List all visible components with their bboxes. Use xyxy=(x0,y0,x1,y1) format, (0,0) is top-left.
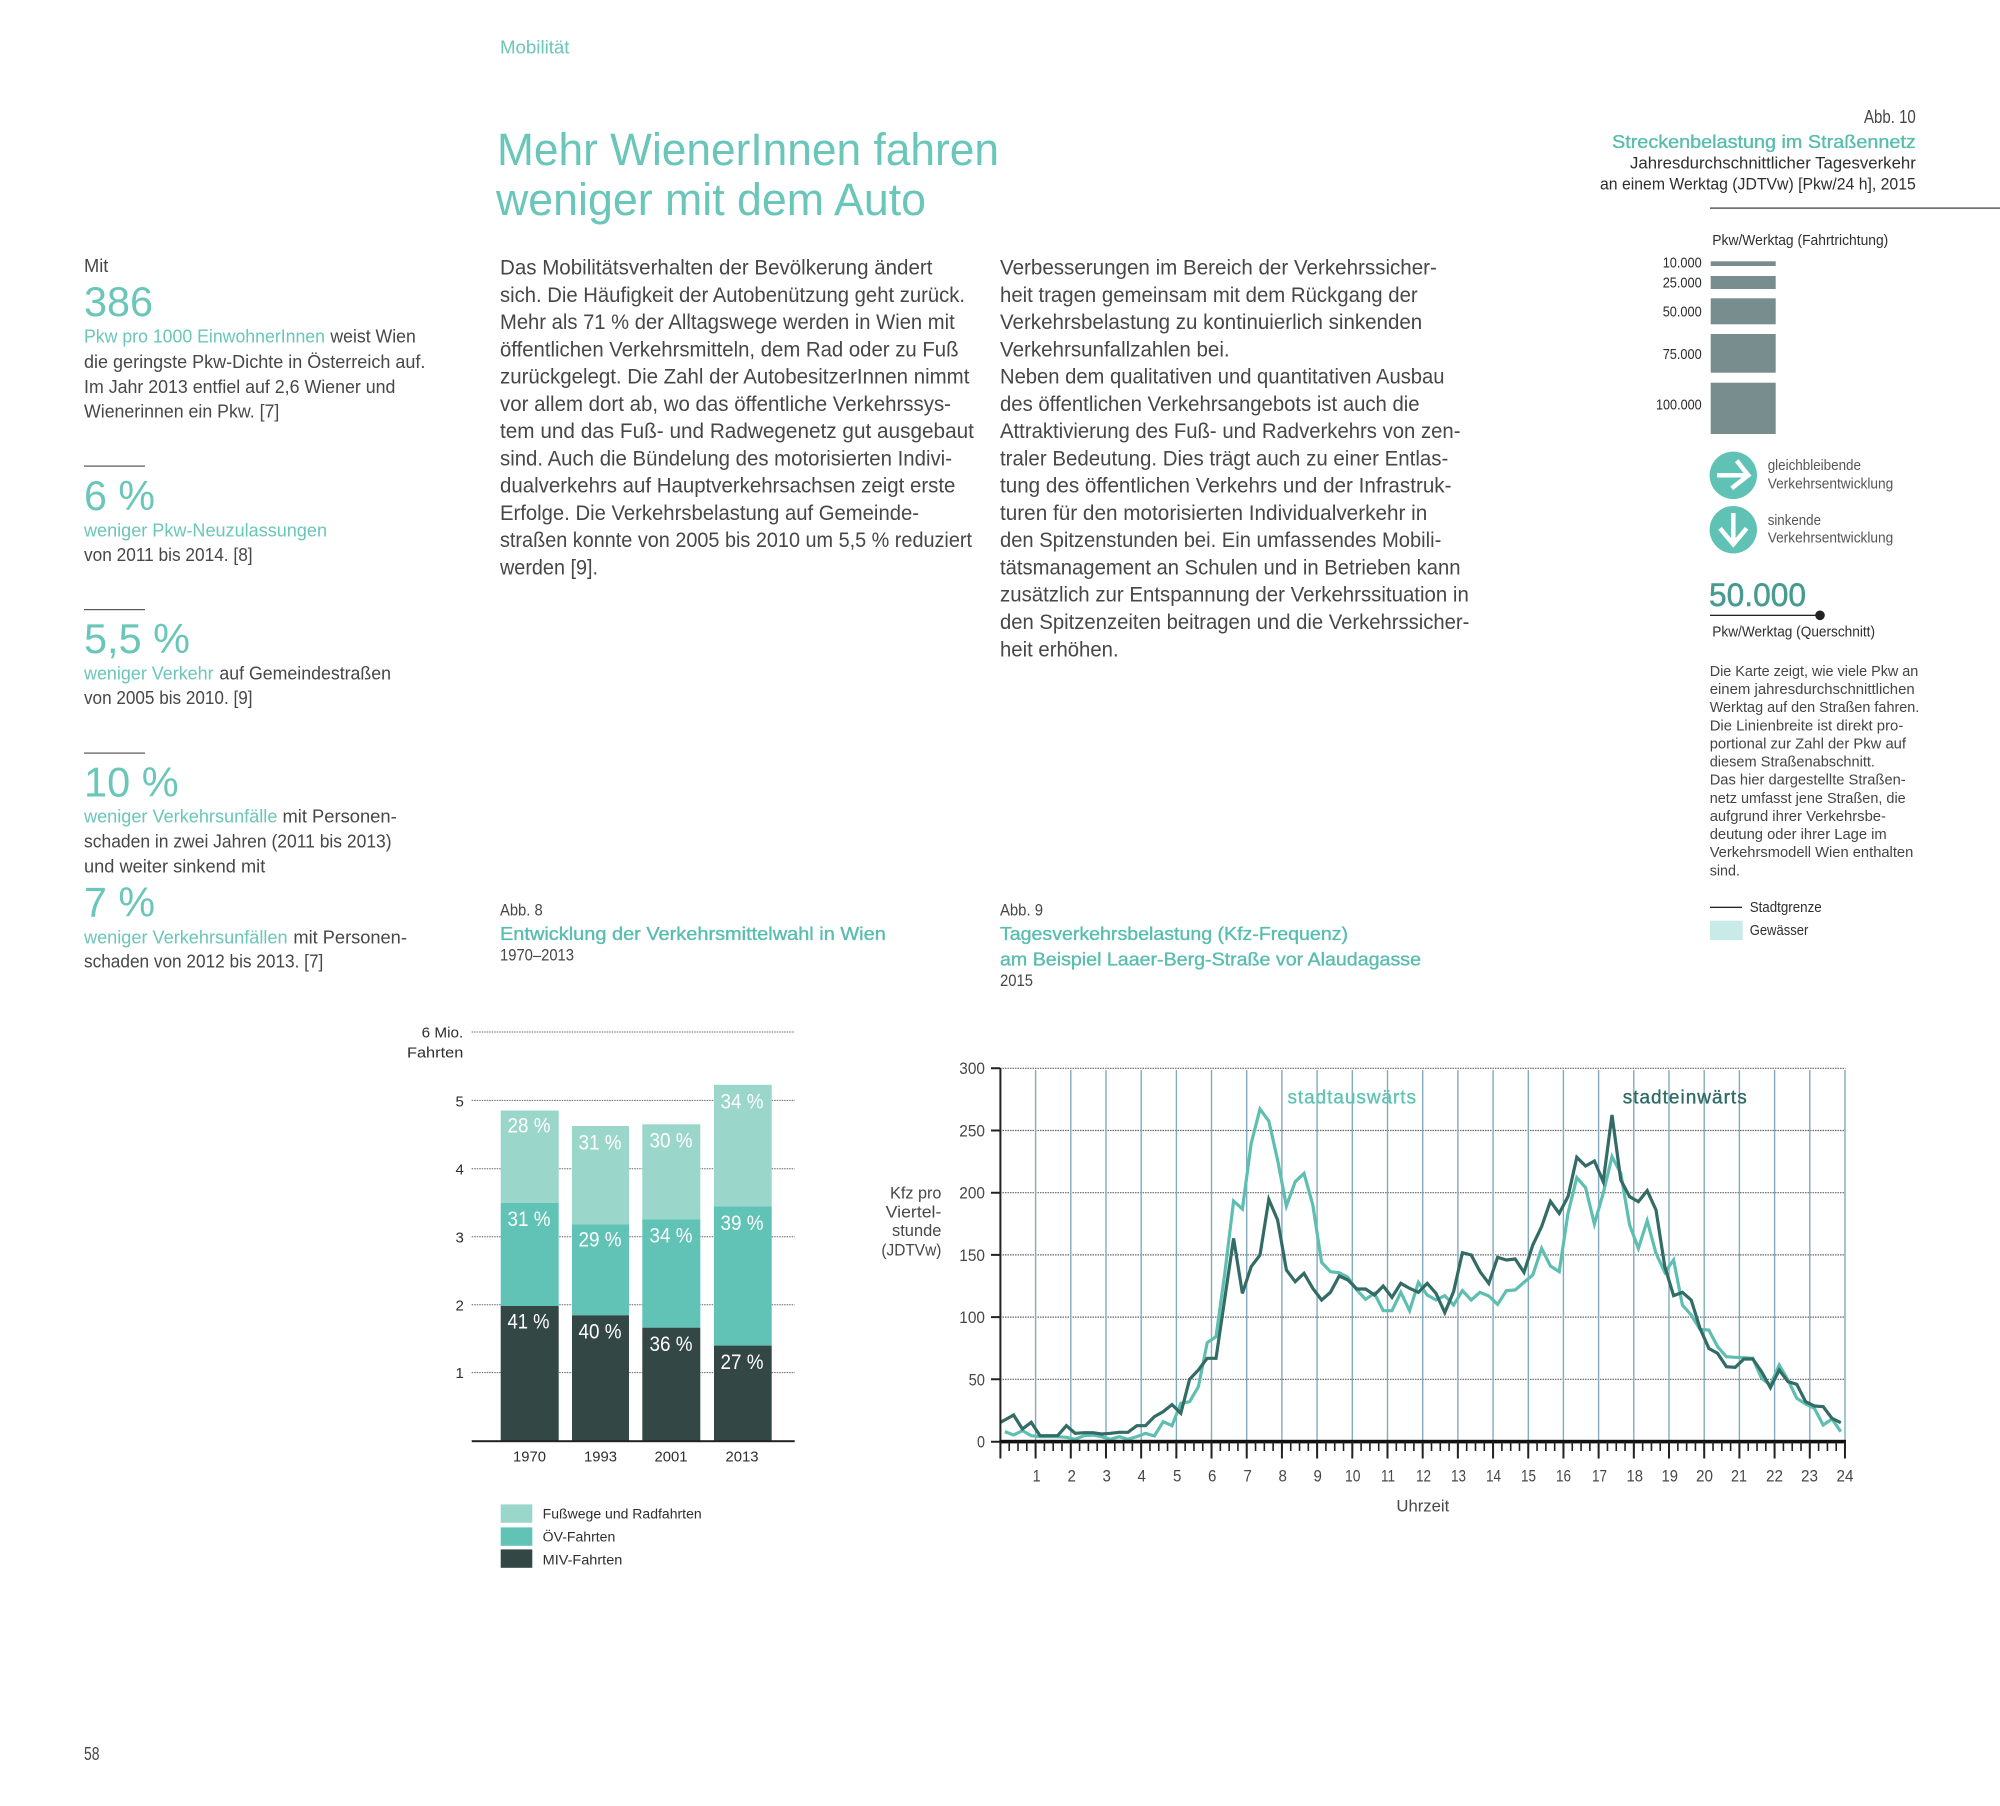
y axis title: (JDTVw) xyxy=(881,1241,941,1260)
series label: stadtauswärts: stadtauswärts xyxy=(1288,1087,1416,1108)
series label: stadteinwärts: stadteinwärts xyxy=(1623,1087,1747,1108)
x axis hour labels: 14 xyxy=(1486,1467,1501,1486)
section label: Mobilität: Mobilität xyxy=(500,37,570,58)
line: stadtauswärts xyxy=(1005,1109,1841,1439)
legend: bar chart: ÖV-Fahrten xyxy=(543,1530,615,1545)
body text column 1 xyxy=(499,256,974,580)
body text column 1: Das Mobilitätsverhalten der Bevölkerung ändert xyxy=(500,256,933,280)
legend: bar chart: MIV-Fahrten xyxy=(543,1553,622,1568)
legend: Stadtgrenze / Gewässer xyxy=(1710,899,1822,940)
x axis hour labels: 23 xyxy=(1801,1467,1818,1486)
line chart: Tagesverkehrsbelastung xyxy=(881,1059,1854,1516)
legend: cross-section marker 50.000: Pkw/Werktag (Querschnitt) xyxy=(1712,624,1875,641)
body text column 2: tung des öffentlichen Verkehrs und der Infrastruk- xyxy=(1000,475,1452,498)
bar 1970: 41 % xyxy=(508,1311,550,1334)
x axis hour labels: 4 xyxy=(1138,1467,1146,1486)
left column: key figures xyxy=(83,255,425,972)
stat: 7 %: weniger Verkehrsunfällen xyxy=(83,926,288,947)
legend: line widths: 10.000 xyxy=(1663,255,1702,272)
y axis labels: 2 xyxy=(456,1298,464,1314)
icon: arrow right xyxy=(1710,452,1757,499)
x axis hour labels: 24 xyxy=(1836,1467,1854,1486)
stat: 10 %: und weiter sinkend mit xyxy=(84,856,265,877)
x axis hour labels: 10 xyxy=(1345,1467,1360,1486)
legend description text: Das hier dargestellte Straßen- xyxy=(1710,772,1906,789)
heading: Abb. 9: Abb. 9 xyxy=(1000,901,1043,919)
stat: 386 Pkw: Mit xyxy=(84,255,108,276)
legend description text: diesem Straßenabschnitt. xyxy=(1710,754,1875,771)
legend description text: sind. xyxy=(1710,862,1740,879)
y axis labels: 3 xyxy=(456,1230,464,1246)
body text column 1: sich. Die Häufigkeit der Autobenützung geht zurück. xyxy=(500,284,965,307)
legend description text: portional zur Zahl der Pkw auf xyxy=(1710,736,1907,752)
x axis hour labels: 15 xyxy=(1521,1467,1536,1486)
bar 1970: 28 % xyxy=(508,1114,550,1138)
legend: line widths: 50.000 xyxy=(1663,303,1702,320)
legend description text: Die Linienbreite ist direkt pro- xyxy=(1710,717,1903,734)
stat: 10 %: weniger Verkehrsunfälle xyxy=(83,806,277,827)
x axis hour labels: 11 xyxy=(1381,1467,1395,1486)
y axis labels: 5 xyxy=(456,1094,464,1110)
stat: 10 %: schaden in zwei Jahren (2011 bis 2013) xyxy=(84,830,392,851)
x axis hour labels: 17 xyxy=(1592,1467,1607,1486)
heading: Abb. 10: Streckenbelastung im Straßennetz xyxy=(1612,132,1916,152)
body text column 1: Mehr als 71 % der Alltagswege werden in Wien mit xyxy=(500,311,955,334)
legend: line widths: 25.000 xyxy=(1663,275,1702,292)
y axis labels: 6 Mio. xyxy=(422,1024,463,1042)
body text column 2: turen für den motorisierten Individualverkehr in xyxy=(1000,502,1427,525)
line: stadteinwärts xyxy=(1000,1115,1841,1436)
x axis hour labels: 5 xyxy=(1173,1467,1181,1486)
y axis title: Viertel- xyxy=(886,1202,941,1221)
body text column 2 xyxy=(1000,256,1469,661)
legend description text: aufgrund ihrer Verkehrsbe- xyxy=(1710,808,1886,825)
heading: Abb. 10: Abb. 10 xyxy=(1864,107,1916,127)
heading: Abb. 8: Abb. 8 xyxy=(500,901,543,919)
stat: 5,5 %: von 2005 bis 2010. [9] xyxy=(84,687,252,708)
body text column 2: heit tragen gemeinsam mit dem Rückgang der xyxy=(1000,284,1418,307)
x axis hour labels: 16 xyxy=(1556,1467,1571,1486)
x axis labels xyxy=(513,1448,758,1465)
title: Mehr WienerInnen fahren xyxy=(497,124,999,175)
legend text: gleichbleibende: gleichbleibende xyxy=(1768,457,1861,474)
title xyxy=(495,124,999,225)
x axis hour labels: 22 xyxy=(1766,1467,1783,1486)
legend description text: deutung oder ihrer Lage im xyxy=(1710,826,1887,843)
body text column 2: tätsmanagement an Schulen und in Betrieben kann xyxy=(1000,556,1460,580)
bar 1970: 31 % xyxy=(508,1208,550,1231)
bar 2001: 36 % xyxy=(650,1333,692,1356)
legend description text xyxy=(1710,663,1919,879)
body text column 2: Verkehrsbelastung zu kontinuierlich sinkenden xyxy=(1000,311,1422,334)
x axis hour labels: 12 xyxy=(1416,1467,1431,1486)
legend: line widths: 100.000 xyxy=(1656,397,1702,414)
legend description text: Die Karte zeigt, wie viele Pkw an xyxy=(1710,663,1918,680)
legend: line widths: 75.000 xyxy=(1663,346,1702,363)
x axis hour labels: 18 xyxy=(1626,1467,1643,1486)
body text column 2: Verbesserungen im Bereich der Verkehrssicher- xyxy=(1000,256,1437,280)
bar 1993: 31 % xyxy=(578,1132,622,1154)
legend: line widths xyxy=(1656,232,1888,434)
body text column 2: den Spitzenzeiten beitragen und die Verkehrssicher- xyxy=(1000,611,1469,634)
y axis labels: 300 xyxy=(959,1059,985,1078)
body text column 1: dualverkehrs auf Hauptverkehrsachsen zeigt erste xyxy=(500,475,955,498)
body text column 1: Erfolge. Die Verkehrsbelastung auf Gemeinde- xyxy=(500,502,919,525)
bar 2001: 34 % xyxy=(650,1225,692,1248)
heading: Abb. 9: Tagesverkehrsbelastung (Kfz-Frequenz) xyxy=(1000,924,1348,944)
body text column 1: vor allem dort ab, wo das öffentliche Verkehrssys- xyxy=(500,393,951,416)
y axis title xyxy=(881,1183,941,1260)
stat: 6 % xyxy=(83,472,327,565)
y axis labels: 4 xyxy=(456,1162,464,1178)
body text column 2: des öffentlichen Verkehrsangebots ist auch die xyxy=(1000,393,1420,416)
x axis hour labels: 1 xyxy=(1033,1467,1041,1486)
legend description text: Werktag auf den Straßen fahren. xyxy=(1710,699,1919,716)
title: weniger mit dem Auto xyxy=(495,174,926,225)
y axis labels: 1 xyxy=(456,1365,464,1382)
body text column 2: Neben dem qualitativen und quantitativen Ausbau xyxy=(1000,366,1444,389)
body text column 2: Attraktivierung des Fuß- und Radverkehrs von zen- xyxy=(1000,420,1460,443)
body text column 2: heit erhöhen. xyxy=(1000,638,1119,661)
x axis labels: 2001 xyxy=(654,1448,688,1465)
body text column 2: den Spitzenstunden bei. Ein umfassendes Mobili- xyxy=(1000,529,1441,552)
body text column 1: tem und das Fuß- und Radwegenetz gut ausgebaut xyxy=(500,420,974,443)
x axis labels: 1993 xyxy=(584,1448,617,1465)
stat: 386 Pkw: Im Jahr 2013 entfiel auf 2,6 Wiener und xyxy=(84,376,395,397)
legend: cross-section marker 50.000 xyxy=(1709,577,1875,641)
x axis hour labels: 20 xyxy=(1696,1467,1713,1486)
stat: 386 Pkw: Wienerinnen ein Pkw. [7] xyxy=(84,400,279,421)
page number: 58 xyxy=(84,1743,100,1764)
y axis labels: Fahrten xyxy=(407,1045,463,1062)
x axis hour labels: 19 xyxy=(1662,1467,1678,1486)
stat: 5,5 %: weniger Verkehr xyxy=(83,662,214,683)
heading: Abb. 10: an einem Werktag (JDTVw) [Pkw/24 h], 2015 xyxy=(1600,175,1916,193)
y axis labels xyxy=(407,1024,464,1382)
legend text: gleichbleibende xyxy=(1768,457,1893,493)
stat: 7 % xyxy=(83,879,407,972)
body text column 1: öffentlichen Verkehrsmitteln, dem Rad oder zu Fuß xyxy=(500,338,958,361)
bar 2013: 34 % xyxy=(720,1091,764,1114)
body text column 2: traler Bedeutung. Dies trägt auch zu einer Entlas- xyxy=(1000,447,1448,470)
body text column 2: Verkehrsunfallzahlen bei. xyxy=(1000,338,1230,361)
x axis hour labels xyxy=(1033,1467,1854,1486)
stat: 6 %: 6 % xyxy=(84,472,155,519)
legend: Stadtgrenze / Gewässer: Stadtgrenze xyxy=(1750,899,1822,916)
stat: 6 %: von 2011 bis 2014. [8] xyxy=(84,544,253,565)
heading: Abb. 9 xyxy=(1000,901,1421,990)
bar chart: Verkehrsmittelwahl xyxy=(407,1024,795,1465)
y axis labels xyxy=(959,1059,985,1452)
bar 1993 xyxy=(572,1126,629,1441)
stat: 7 %: 7 % xyxy=(84,879,155,926)
legend: Stadtgrenze / Gewässer: Gewässer xyxy=(1750,922,1808,939)
y axis labels: 50 xyxy=(969,1370,985,1389)
y axis labels: 200 xyxy=(959,1184,985,1203)
stat: 10 %: mit Personen- xyxy=(282,806,397,827)
x axis hour labels: 2 xyxy=(1068,1467,1076,1486)
body text column 1: straßen konnte von 2005 bis 2010 um 5,5 % reduziert xyxy=(500,529,972,552)
x axis title: Uhrzeit xyxy=(1396,1497,1450,1516)
y axis labels: 150 xyxy=(959,1246,985,1265)
stat: 5,5 %: 5,5 % xyxy=(84,615,190,662)
stat: 10 %: 10 % xyxy=(84,759,179,806)
x axis labels: 1970 xyxy=(513,1448,546,1465)
legend: line widths: Pkw/Werktag (Fahrtrichtung) xyxy=(1712,232,1888,249)
legend text: sinkende: sinkende xyxy=(1768,512,1821,529)
stat: 10 % xyxy=(83,759,397,877)
heading: Abb. 9: 2015 xyxy=(1000,972,1033,990)
y axis title: stunde xyxy=(892,1221,941,1240)
x axis hour labels: 8 xyxy=(1278,1467,1287,1486)
bar 2013 xyxy=(714,1085,772,1441)
bar 2013: 27 % xyxy=(720,1351,764,1374)
axes and ticks xyxy=(991,1068,1846,1450)
x axis labels: 2013 xyxy=(726,1448,758,1465)
x axis hour labels: 9 xyxy=(1314,1467,1322,1486)
legend: bar chart: Fußwege und Radfahrten xyxy=(543,1507,702,1522)
heading: Abb. 8 xyxy=(500,901,886,965)
stat: 5,5 %: auf Gemeindestraßen xyxy=(219,662,391,683)
stat: 386 Pkw: 386 xyxy=(84,278,153,325)
x axis hour labels: 21 xyxy=(1731,1467,1747,1486)
body text column 1: werden [9]. xyxy=(499,556,598,580)
stat: 386 Pkw: Pkw pro 1000 EinwohnerInnen xyxy=(84,325,325,346)
bar 2001: 30 % xyxy=(650,1130,692,1153)
bar 2013: 39 % xyxy=(720,1212,764,1235)
x axis hour labels: 3 xyxy=(1102,1467,1111,1486)
bar 1993: 40 % xyxy=(578,1321,622,1344)
y axis labels: 250 xyxy=(959,1122,985,1140)
heading: Abb. 8: 1970–2013 xyxy=(500,947,574,965)
heading: Abb. 10 xyxy=(1600,107,1916,193)
heading: Abb. 10: Jahresdurchschnittlicher Tagesverkehr xyxy=(1630,155,1916,173)
legend description text: einem jahresdurchschnittlichen xyxy=(1710,681,1915,698)
x axis hour labels: 7 xyxy=(1244,1467,1252,1486)
stat: 7 %: mit Personen- xyxy=(293,926,407,947)
stat: 7 %: schaden von 2012 bis 2013. [7] xyxy=(84,951,323,972)
legend text: sinkende: Verkehrsentwicklung xyxy=(1768,530,1893,547)
stat: 386 Pkw xyxy=(84,255,425,421)
stat: 6 %: weniger Pkw-Neuzulassungen xyxy=(83,520,327,541)
panel: Abb. 10 legend xyxy=(1600,107,2000,940)
x axis hour labels: 13 xyxy=(1451,1467,1466,1486)
legend description text: Verkehrsmodell Wien enthalten xyxy=(1710,844,1913,861)
bar 1970 xyxy=(501,1110,559,1441)
icon: arrow down xyxy=(1710,506,1757,553)
y axis title: Kfz pro xyxy=(890,1183,941,1202)
stat: 386 Pkw: weist Wien xyxy=(329,325,416,346)
legend text: gleichbleibende: Verkehrsentwicklung xyxy=(1768,476,1893,493)
legend: bar chart xyxy=(501,1504,702,1568)
stat: 5,5 % xyxy=(83,615,391,708)
heading: Abb. 9: am Beispiel Laaer-Berg-Straße vor Alaudagasse xyxy=(1000,950,1421,970)
legend text: sinkende xyxy=(1768,512,1893,547)
y axis labels: 0 xyxy=(977,1432,985,1452)
legend description text: netz umfasst jene Straßen, die xyxy=(1710,790,1906,807)
heading: Abb. 8: Entwicklung der Verkehrsmittelwahl in Wien xyxy=(500,924,886,944)
body text column 1: sind. Auch die Bündelung des motorisierten Indivi- xyxy=(500,447,952,470)
stat: 386 Pkw: die geringste Pkw-Dichte in Österreich auf. xyxy=(84,351,425,372)
bar 2001 xyxy=(642,1124,700,1441)
y axis labels: 100 xyxy=(959,1308,985,1327)
bar 1993: 29 % xyxy=(578,1228,622,1251)
legend: cross-section marker 50.000: 50.000 xyxy=(1709,577,1806,613)
body text column 1: zurückgelegt. Die Zahl der AutobesitzerInnen nimmt xyxy=(500,366,970,389)
body text column 2: zusätzlich zur Entspannung der Verkehrssituation in xyxy=(1000,584,1469,607)
x axis hour labels: 6 xyxy=(1208,1467,1216,1486)
